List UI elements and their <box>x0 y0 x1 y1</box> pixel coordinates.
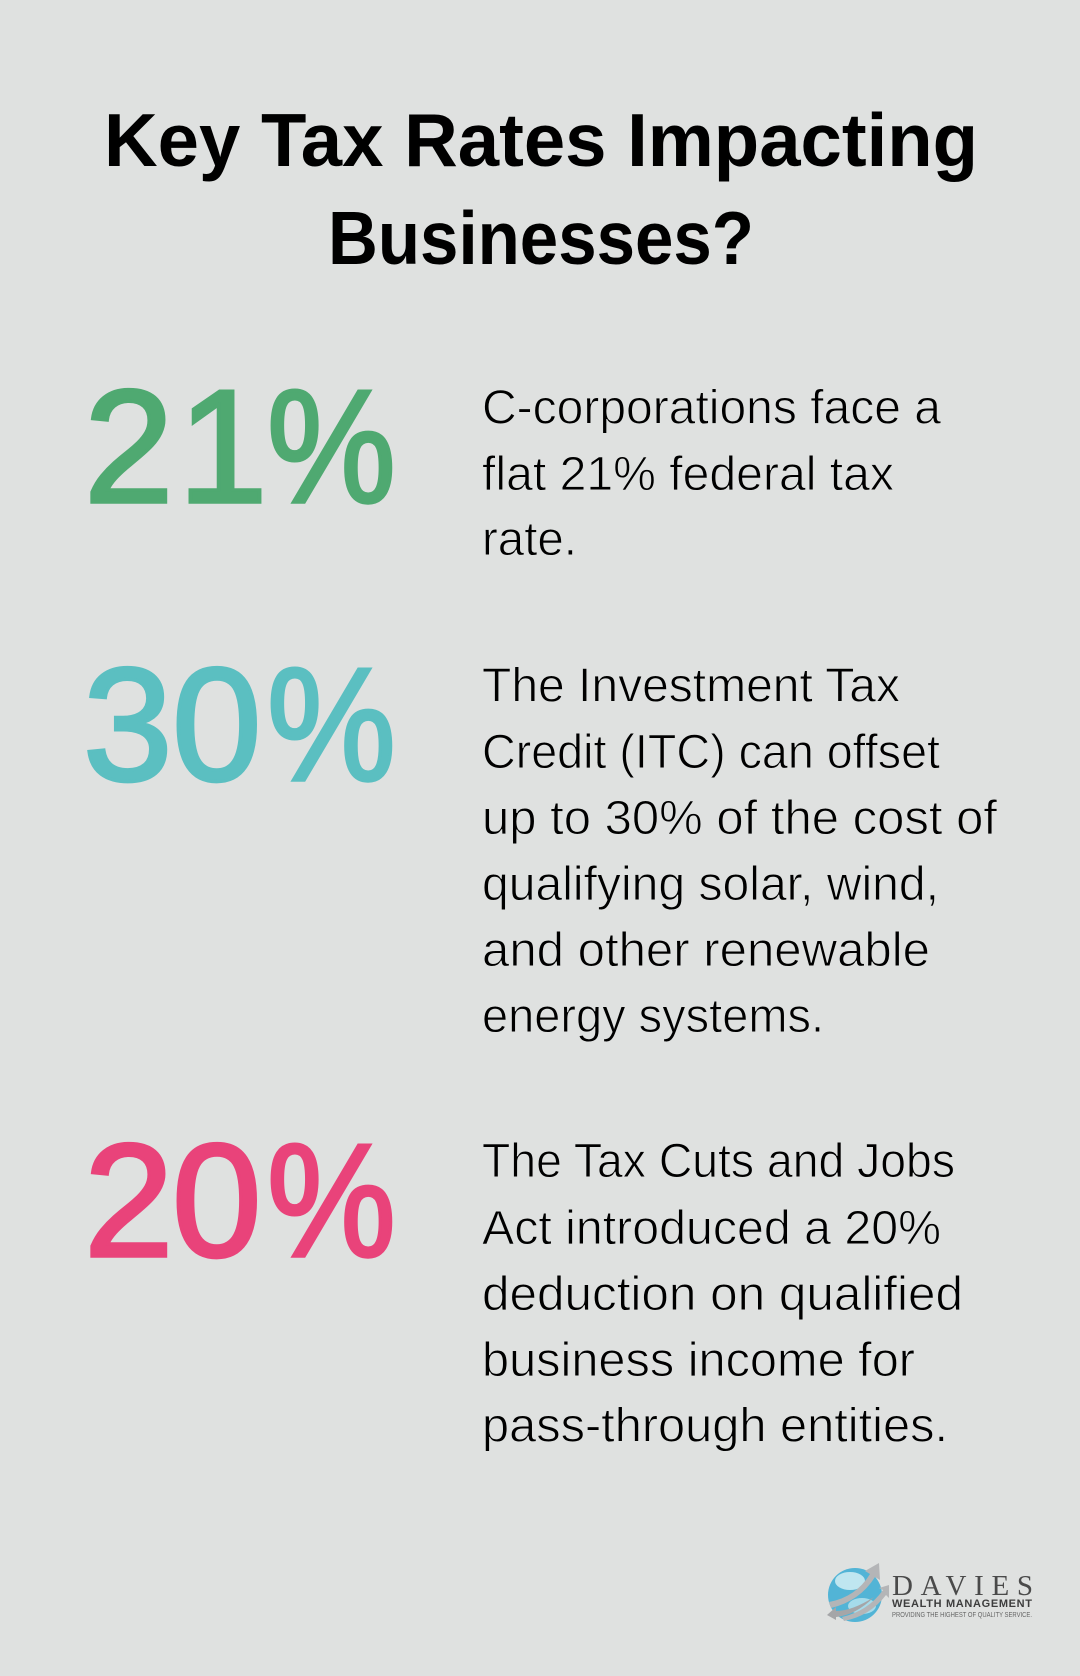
icon: globe with arrows <box>827 1563 889 1622</box>
stat: 30% <box>83 635 396 815</box>
text: 21% description: flat 21% federal tax <box>482 448 894 501</box>
stat: 30%: % <box>267 635 396 815</box>
title: Businesses? <box>328 196 754 280</box>
stat: 20%: % <box>267 1111 396 1291</box>
text: 21% description <box>482 382 941 566</box>
text: 20% description: The Tax Cuts and Jobs <box>482 1135 955 1188</box>
text: 21% description: rate. <box>482 513 577 566</box>
stat: 20%: 20 <box>84 1111 262 1291</box>
text: 20% description: deduction on qualified <box>482 1268 963 1321</box>
text: 30% description: The Investment Tax <box>482 660 900 712</box>
text: 30% description: Credit (ITC) can offset <box>482 726 940 779</box>
text: 21% description: C-corporations face a <box>482 382 941 434</box>
text: 30% description: qualifying solar, wind, <box>482 858 939 911</box>
stat: 21%: 21 <box>84 357 268 537</box>
logo subtitle: WEALTH MANAGEMENT <box>892 1598 1032 1610</box>
text: 30% description: up to 30% of the cost of <box>482 792 998 845</box>
title: Key Tax Rates Impacting <box>104 98 978 182</box>
text: 20% description: business income for <box>482 1334 915 1387</box>
text: 30% description <box>482 660 998 1043</box>
text: 30% description: and other renewable <box>482 924 930 977</box>
logo: Davies Wealth Management <box>827 1563 1033 1622</box>
title <box>104 98 978 280</box>
stat: 30%: 30 <box>83 635 262 815</box>
text: 20% description <box>482 1135 963 1452</box>
text: 20% description: Act introduced a 20% <box>482 1202 941 1255</box>
logo tagline: PROVIDING THE HIGHEST OF QUALITY SERVICE. <box>892 1612 1032 1619</box>
stat: 21% <box>84 357 396 537</box>
logo wordmark: DAVIES <box>892 1570 1033 1602</box>
text: 30% description: energy systems. <box>482 990 824 1043</box>
stat: 21%: % <box>267 357 396 537</box>
stat: 20% <box>84 1111 396 1291</box>
text: 20% description: pass-through entities. <box>482 1400 948 1452</box>
